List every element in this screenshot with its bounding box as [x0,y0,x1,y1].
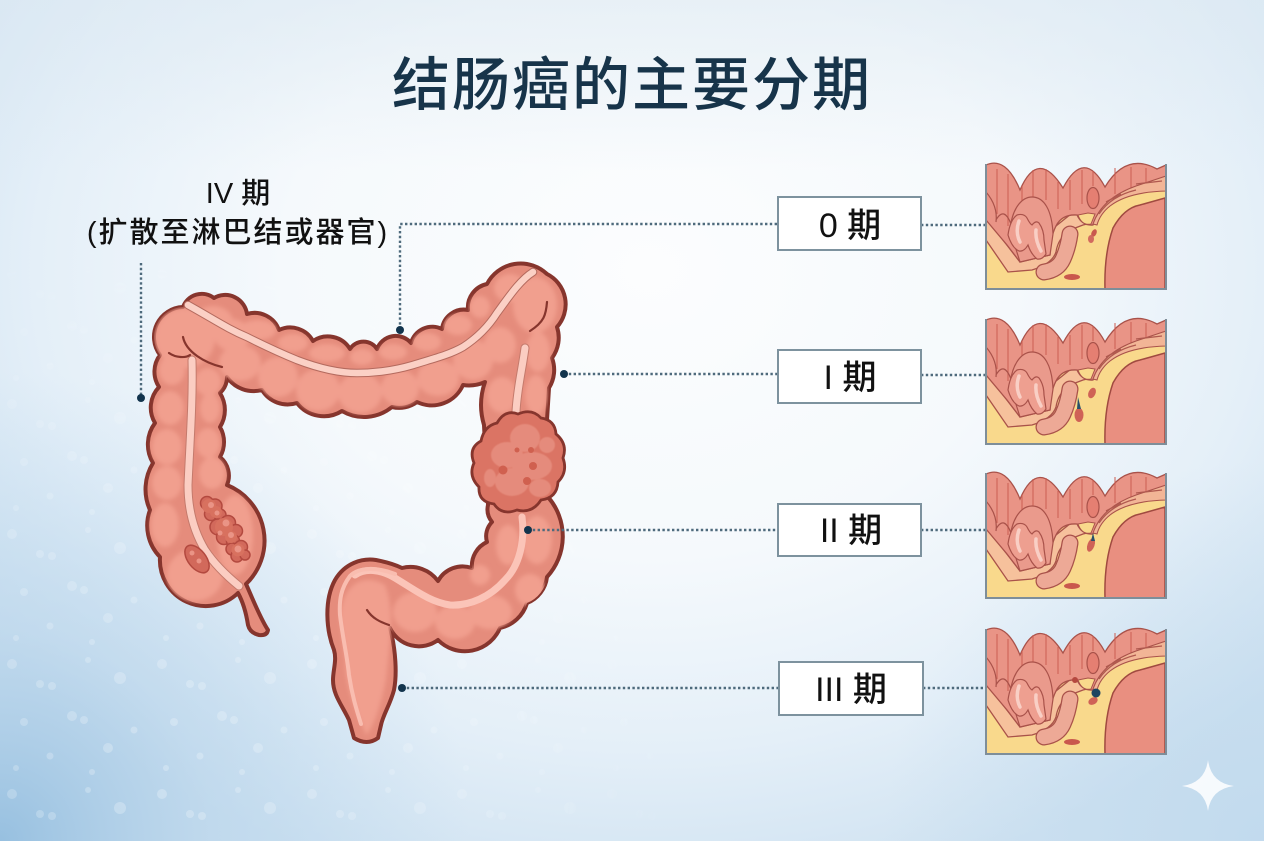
polyps in cecum [180,496,250,577]
tumor [472,412,565,512]
panel: stage 0 cross-section [986,163,1166,289]
inner lumen band [188,272,533,724]
label: stage I [778,350,921,403]
label: stage III [779,662,923,715]
title: 结肠癌的主要分期 [392,53,872,118]
label: stage 0 [778,197,921,250]
label: stage 0: 0 期 [819,207,881,245]
IV stage label [87,178,389,249]
fold lines [169,302,547,625]
colon illustration [146,263,566,742]
label: stage I: I 期 [824,359,876,397]
label: stage III: III 期 [815,671,887,709]
label: stage II [778,504,921,556]
panel: stage II cross-section [986,472,1166,598]
leader dots [137,326,568,692]
icon: sparkle star [1182,760,1234,811]
panel: stage I cross-section [986,318,1166,444]
IV stage label: IV 期 [206,178,270,210]
panel: stage III cross-section [986,628,1166,754]
IV stage label: (扩散至淋巴结或器官) [87,216,389,249]
leader lines [141,224,986,688]
label: stage II: II 期 [820,512,882,550]
